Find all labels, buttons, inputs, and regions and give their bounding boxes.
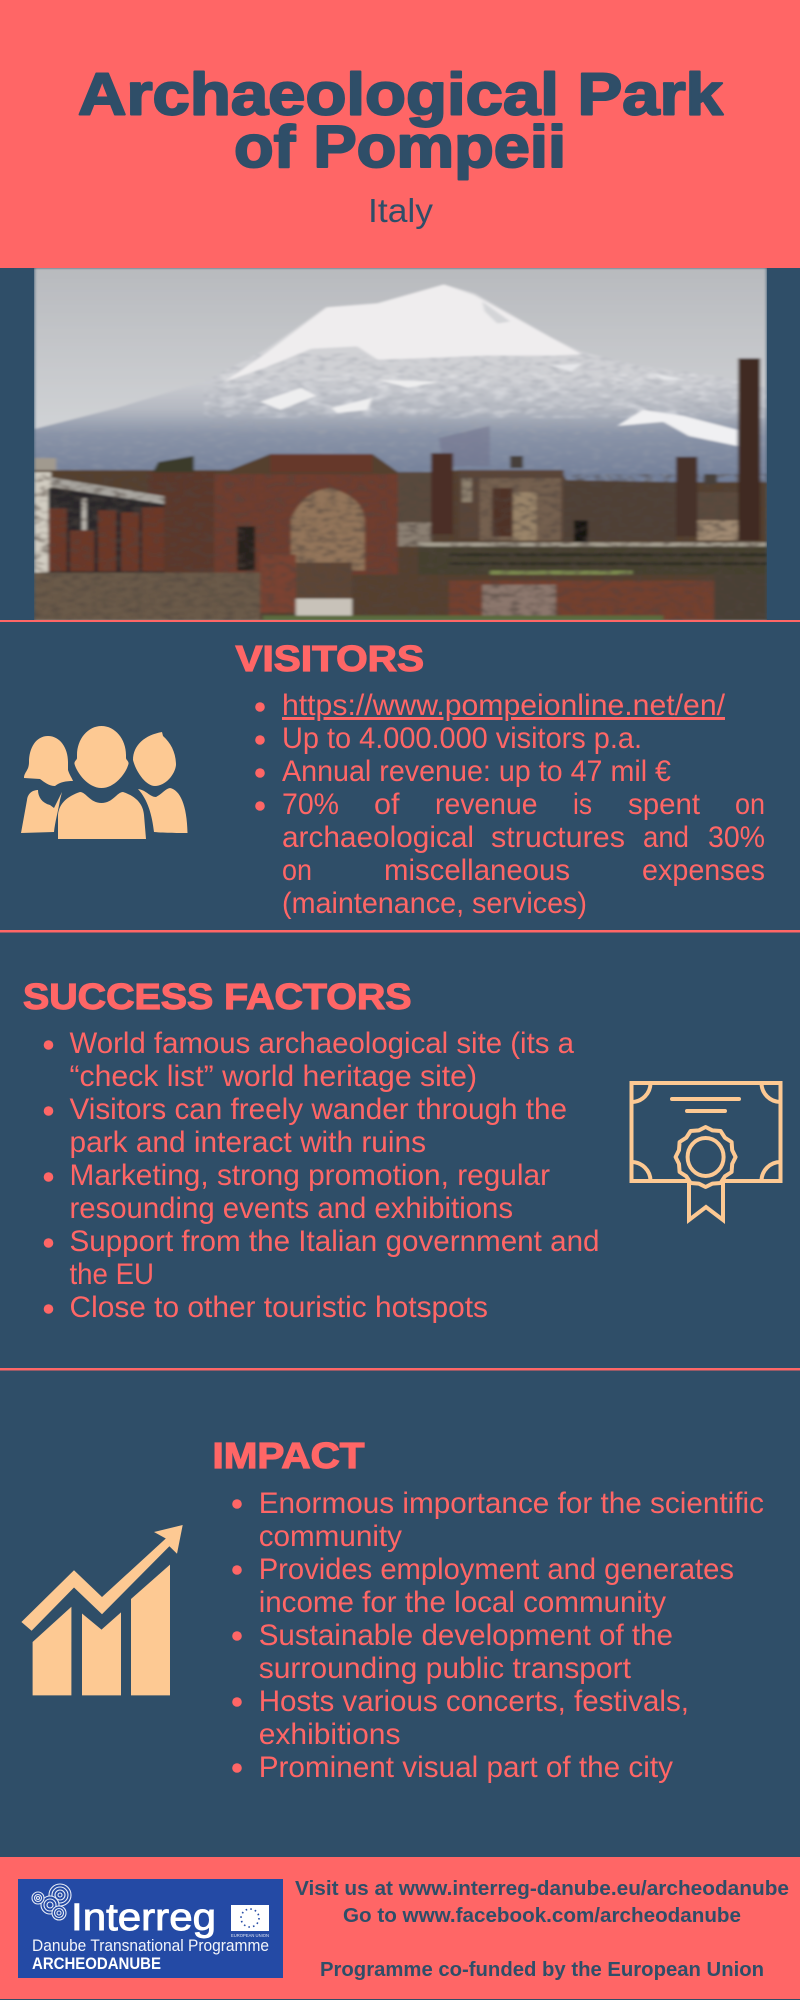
heading: success factors: SUCCESS FACTORS bbox=[23, 976, 412, 1017]
list: success factors: resounding events and exhibitions bbox=[70, 1192, 513, 1225]
list: success factors: Marketing, strong promotion, regular bbox=[70, 1159, 550, 1192]
list: visitor facts: archaeological bbox=[282, 821, 474, 854]
text: contact and funding: Go to www.facebook.com/archeodanube bbox=[343, 1905, 741, 1927]
list: impact bbox=[232, 1487, 764, 1784]
list: visitor facts: (maintenance, services) bbox=[282, 887, 587, 920]
icon: certificate bbox=[632, 1083, 780, 1220]
list: impact: income for the local community bbox=[259, 1586, 666, 1619]
list: visitor facts: Annual revenue: up to 47 mil € bbox=[282, 755, 671, 788]
lower wall bbox=[34, 573, 260, 621]
list: impact: Hosts various concerts, festivals, bbox=[259, 1685, 689, 1718]
list: visitor facts: structures bbox=[491, 821, 625, 854]
list: visitor facts: Up to 4.000.000 visitors p.a. bbox=[282, 722, 642, 755]
title bbox=[78, 62, 723, 180]
list: success factors: Support from the Italian government and bbox=[70, 1225, 600, 1258]
central building bbox=[398, 472, 431, 522]
heading: visitors: VISITORS bbox=[236, 638, 424, 679]
list: visitor facts: https://www.pompeionline.net/en/ bbox=[282, 689, 726, 722]
list: visitor facts: is bbox=[573, 788, 592, 821]
list: success factors: World famous archaeological site (its a bbox=[70, 1027, 574, 1060]
list: impact: exhibitions bbox=[259, 1718, 400, 1751]
left portico bbox=[34, 458, 56, 470]
list: success factors: park and interact with ruins bbox=[70, 1126, 426, 1159]
panel: impact bbox=[21, 1435, 764, 1784]
list: success factors: “check list” world heritage site) bbox=[70, 1060, 477, 1093]
list: visitor facts: miscellaneous bbox=[384, 854, 570, 887]
text: contact and funding bbox=[295, 1878, 789, 1981]
list: visitor facts: on bbox=[282, 854, 312, 887]
list: visitor facts bbox=[255, 689, 765, 920]
list: impact: Sustainable development of the bbox=[259, 1619, 673, 1652]
heading: impact: IMPACT bbox=[212, 1435, 364, 1476]
list: impact: Enormous importance for the scientific bbox=[259, 1487, 764, 1520]
list: visitor facts: on bbox=[735, 788, 765, 821]
panel: footer bbox=[0, 1857, 800, 1999]
list: visitor facts: 30% bbox=[708, 821, 765, 854]
title: of Pompeii bbox=[234, 114, 566, 180]
logo: Interreg: Interreg bbox=[71, 1897, 216, 1939]
photo: Vesuvius and Pompeii ruins bbox=[34, 268, 767, 622]
list: visitor facts: of bbox=[374, 788, 400, 821]
list: impact: Prominent visual part of the city bbox=[259, 1751, 673, 1784]
logo: Interreg: Danube Transnational Programme bbox=[32, 1936, 269, 1955]
icon: EU flag bbox=[231, 1905, 269, 1938]
list: visitor facts: and bbox=[643, 821, 689, 854]
list: success factors bbox=[44, 1027, 599, 1324]
panel: success factors bbox=[23, 976, 780, 1324]
list: impact: community bbox=[259, 1520, 402, 1553]
title: Archaeological Park bbox=[78, 62, 723, 128]
texture over ruins bbox=[34, 474, 767, 621]
list: success factors: the EU bbox=[70, 1258, 154, 1291]
divider line bbox=[0, 930, 800, 932]
logo: Interreg: ARCHEODANUBE bbox=[32, 1955, 161, 1973]
text: contact and funding: Visit us at www.interreg-danube.eu/archeodanube bbox=[295, 1878, 789, 1900]
icon: rising bar chart with arrow bbox=[21, 1525, 183, 1695]
text: contact and funding: Programme co-funded by the European Union bbox=[320, 1959, 764, 1981]
header panel bbox=[0, 0, 800, 268]
panel: visitors bbox=[21, 638, 765, 920]
icon: group of people bbox=[21, 726, 188, 839]
divider line bbox=[0, 1368, 800, 1370]
columns bbox=[431, 453, 453, 534]
list: visitor facts: spent bbox=[628, 788, 701, 821]
subtitle: country: Italy bbox=[368, 192, 434, 229]
list: success factors: Close to other touristic hotspots bbox=[70, 1291, 488, 1324]
list: visitor facts: revenue bbox=[435, 788, 538, 821]
logo: Interreg bbox=[18, 1879, 283, 1978]
divider line bbox=[0, 620, 800, 622]
list: visitor facts: expenses bbox=[642, 854, 765, 887]
ruins mass bbox=[34, 454, 767, 621]
list: impact: surrounding public transport bbox=[259, 1652, 632, 1685]
icon: swirl rings bbox=[32, 1884, 71, 1920]
list: success factors: Visitors can freely wander through the bbox=[70, 1093, 567, 1126]
stairs bbox=[418, 547, 767, 574]
list: impact: Provides employment and generates bbox=[259, 1553, 734, 1586]
icon: EU flag: EUROPEAN UNION bbox=[231, 1933, 269, 1938]
list: visitor facts: 70% bbox=[282, 788, 339, 821]
